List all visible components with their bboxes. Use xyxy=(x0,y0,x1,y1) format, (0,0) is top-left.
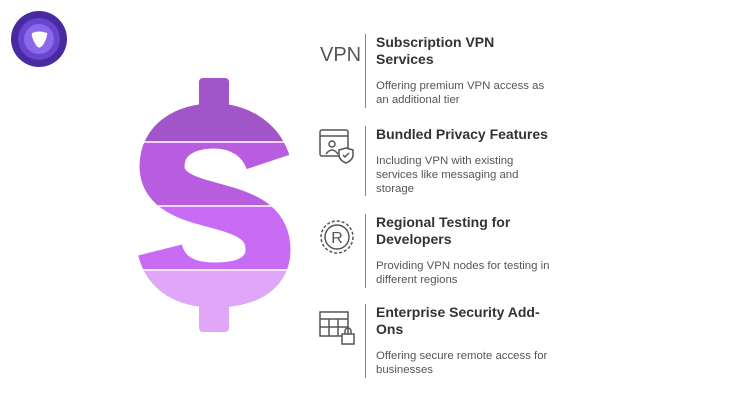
item 1: an additional tier xyxy=(376,94,460,106)
item 1 xyxy=(365,34,576,108)
item 3: different regions xyxy=(376,274,457,286)
item 4 xyxy=(365,304,576,378)
item 2 xyxy=(365,126,576,196)
icon: VPN: VPN xyxy=(320,44,361,66)
item 2: storage xyxy=(376,183,414,195)
logo xyxy=(11,11,67,67)
item 1: Offering premium VPN access as xyxy=(376,80,544,92)
item 3: Developers xyxy=(376,231,451,247)
item 4: Offering secure remote access for xyxy=(376,350,547,362)
item 3 xyxy=(365,214,576,288)
dollar sign xyxy=(138,78,290,332)
item 4: businesses xyxy=(376,364,433,376)
item 4: Enterprise Security Add- xyxy=(376,304,540,320)
icon: privacy xyxy=(319,129,354,164)
item 1: Services xyxy=(376,51,434,67)
item 3: Providing VPN nodes for testing in xyxy=(376,260,550,272)
item 1: Subscription VPN xyxy=(376,34,494,50)
item 2: Including VPN with existing xyxy=(376,155,513,167)
icon: enterprise xyxy=(319,311,355,345)
item 2: Bundled Privacy Features xyxy=(376,126,548,142)
icon: regional xyxy=(320,220,354,254)
icon: regional: R xyxy=(331,230,343,247)
item 4: Ons xyxy=(376,321,403,337)
item 3: Regional Testing for xyxy=(376,214,510,230)
item 2: services like messaging and xyxy=(376,169,518,181)
